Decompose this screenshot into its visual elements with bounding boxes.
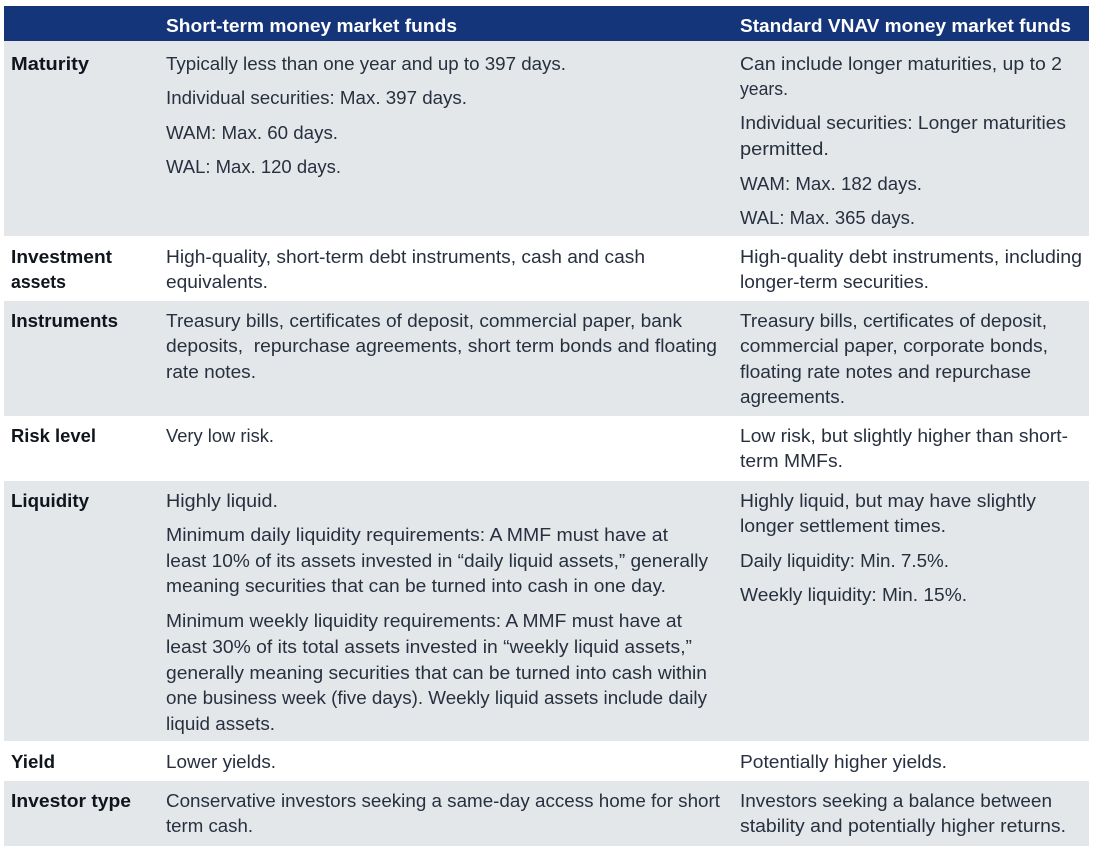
row: yield: [11, 752, 947, 772]
header row: [4, 6, 1089, 41]
standard VNAV instruments text: commercial paper, corporate bonds,: [740, 336, 1048, 356]
standard VNAV maturity text: [740, 54, 1066, 228]
row: investor type: [4, 781, 1089, 846]
short-term investment assets text: [166, 247, 645, 292]
standard VNAV maturity text: WAL: Max. 365 days.: [740, 208, 915, 228]
row label: investment assets: Investment: [11, 247, 112, 267]
short-term liquidity text: meaning securities that can be turned into cash in one day.: [166, 576, 666, 596]
row label: maturity: Maturity: [11, 54, 89, 74]
row label: liquidity: Liquidity: [11, 491, 89, 511]
short-term investment assets text: equivalents.: [166, 272, 268, 292]
standard VNAV liquidity text: longer settlement times.: [740, 516, 946, 536]
standard VNAV risk text: [740, 426, 1068, 471]
short-term liquidity text: [166, 491, 708, 734]
short-term risk text: Very low risk.: [166, 426, 274, 446]
standard VNAV maturity text: permitted.: [740, 139, 829, 159]
row: risk level: [11, 426, 1068, 471]
standard VNAV maturity text: Can include longer maturities, up to 2: [740, 54, 1062, 74]
short-term investor text: Conservative investors seeking a same-day access home for short: [166, 791, 720, 811]
standard VNAV maturity text: years.: [740, 79, 788, 99]
standard VNAV instruments text: floating rate notes and repurchase: [740, 362, 1031, 382]
standard VNAV liquidity text: Weekly liquidity: Min. 15%.: [740, 585, 967, 605]
standard VNAV investment assets text: High-quality debt instruments, including: [740, 247, 1082, 267]
standard VNAV maturity text: WAM: Max. 182 days.: [740, 174, 922, 194]
row label: yield: Yield: [11, 752, 55, 772]
standard VNAV investment assets text: [740, 247, 1082, 292]
short-term liquidity text: least 10% of its assets invested in “daily liquid assets,” generally: [166, 551, 708, 571]
short-term maturity text: WAL: Max. 120 days.: [166, 157, 341, 177]
standard VNAV liquidity text: Daily liquidity: Min. 7.5%.: [740, 551, 949, 571]
short-term yield text: Lower yields.: [166, 752, 276, 772]
standard VNAV yield text: Potentially higher yields.: [740, 752, 947, 772]
short-term maturity text: [166, 54, 566, 177]
short-term instruments text: [166, 311, 717, 382]
row label: risk level: Risk level: [11, 426, 96, 446]
short-term liquidity text: least 30% of its total assets invested in “weekly liquid assets,”: [166, 637, 692, 657]
standard VNAV risk text: Low risk, but slightly higher than short-: [740, 426, 1068, 446]
row: maturity: [4, 41, 1089, 236]
standard VNAV investor text: Investors seeking a balance between: [740, 791, 1052, 811]
short-term investor text: term cash.: [166, 816, 253, 836]
standard VNAV liquidity text: [740, 491, 1036, 605]
row label: instruments: Instruments: [11, 311, 118, 331]
short-term instruments text: rate notes.: [166, 362, 256, 382]
standard VNAV instruments text: Treasury bills, certificates of deposit,: [740, 311, 1047, 331]
short-term liquidity text: Minimum weekly liquidity requirements: A MMF must have at: [166, 611, 682, 631]
row: investment assets: [11, 247, 1082, 292]
column heading: standard VNAV: Standard VNAV money market funds: [740, 16, 1071, 36]
standard VNAV instruments text: [740, 311, 1048, 407]
row: instruments: [4, 301, 1089, 416]
short-term maturity text: Individual securities: Max. 397 days.: [166, 88, 467, 108]
row: liquidity: [4, 481, 1089, 741]
short-term maturity text: Typically less than one year and up to 397 days.: [166, 54, 566, 74]
standard VNAV investor text: stability and potentially higher returns.: [740, 816, 1066, 836]
short-term liquidity text: liquid assets.: [166, 714, 275, 734]
row label: investment assets: assets: [11, 272, 66, 292]
row label: investor type: Investor type: [11, 791, 131, 811]
short-term instruments text: deposits, repurchase agreements, short term bonds and floating: [166, 336, 717, 356]
short-term investment assets text: High-quality, short-term debt instruments, cash and cash: [166, 247, 645, 267]
short-term liquidity text: one business week (five days). Weekly liquid assets include daily: [166, 688, 707, 708]
short-term liquidity text: Highly liquid.: [166, 491, 278, 511]
standard VNAV liquidity text: Highly liquid, but may have slightly: [740, 491, 1036, 511]
standard VNAV investor text: [740, 791, 1066, 836]
short-term instruments text: Treasury bills, certificates of deposit, commercial paper, bank: [166, 311, 683, 331]
short-term investor text: [166, 791, 720, 836]
row label: investment assets: [11, 247, 112, 292]
standard VNAV instruments text: agreements.: [740, 387, 845, 407]
short-term liquidity text: Minimum daily liquidity requirements: A MMF must have at: [166, 525, 668, 545]
column heading: short-term: Short-term money market funds: [166, 16, 457, 36]
standard VNAV risk text: term MMFs.: [740, 451, 843, 471]
standard VNAV maturity text: Individual securities: Longer maturities: [740, 113, 1066, 133]
standard VNAV investment assets text: longer-term securities.: [740, 272, 929, 292]
short-term liquidity text: generally meaning securities that can be turned into cash within: [166, 663, 707, 683]
short-term maturity text: WAM: Max. 60 days.: [166, 123, 338, 143]
